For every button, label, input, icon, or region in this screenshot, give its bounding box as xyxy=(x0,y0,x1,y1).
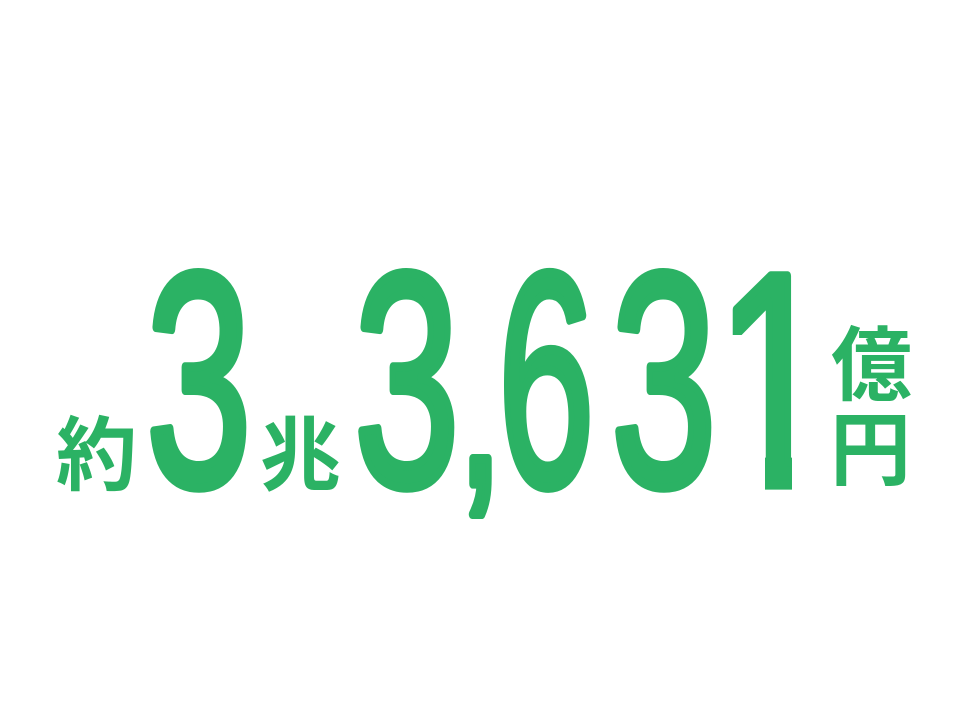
text: prefix 約: 約 xyxy=(56,412,137,502)
number: 3: 3 xyxy=(354,210,460,550)
number: 6: 6 xyxy=(498,211,594,550)
number: 3: 3 xyxy=(146,210,252,550)
text: unit 億: 億 xyxy=(831,322,912,412)
number: comma: , xyxy=(457,270,503,535)
number: 3: 3 xyxy=(611,210,717,550)
text: unit 円: 円 xyxy=(830,407,911,497)
infographic: total amount figure xyxy=(57,268,911,519)
number: 1: 1 xyxy=(716,209,834,550)
text: unit 兆: 兆 xyxy=(260,412,341,502)
